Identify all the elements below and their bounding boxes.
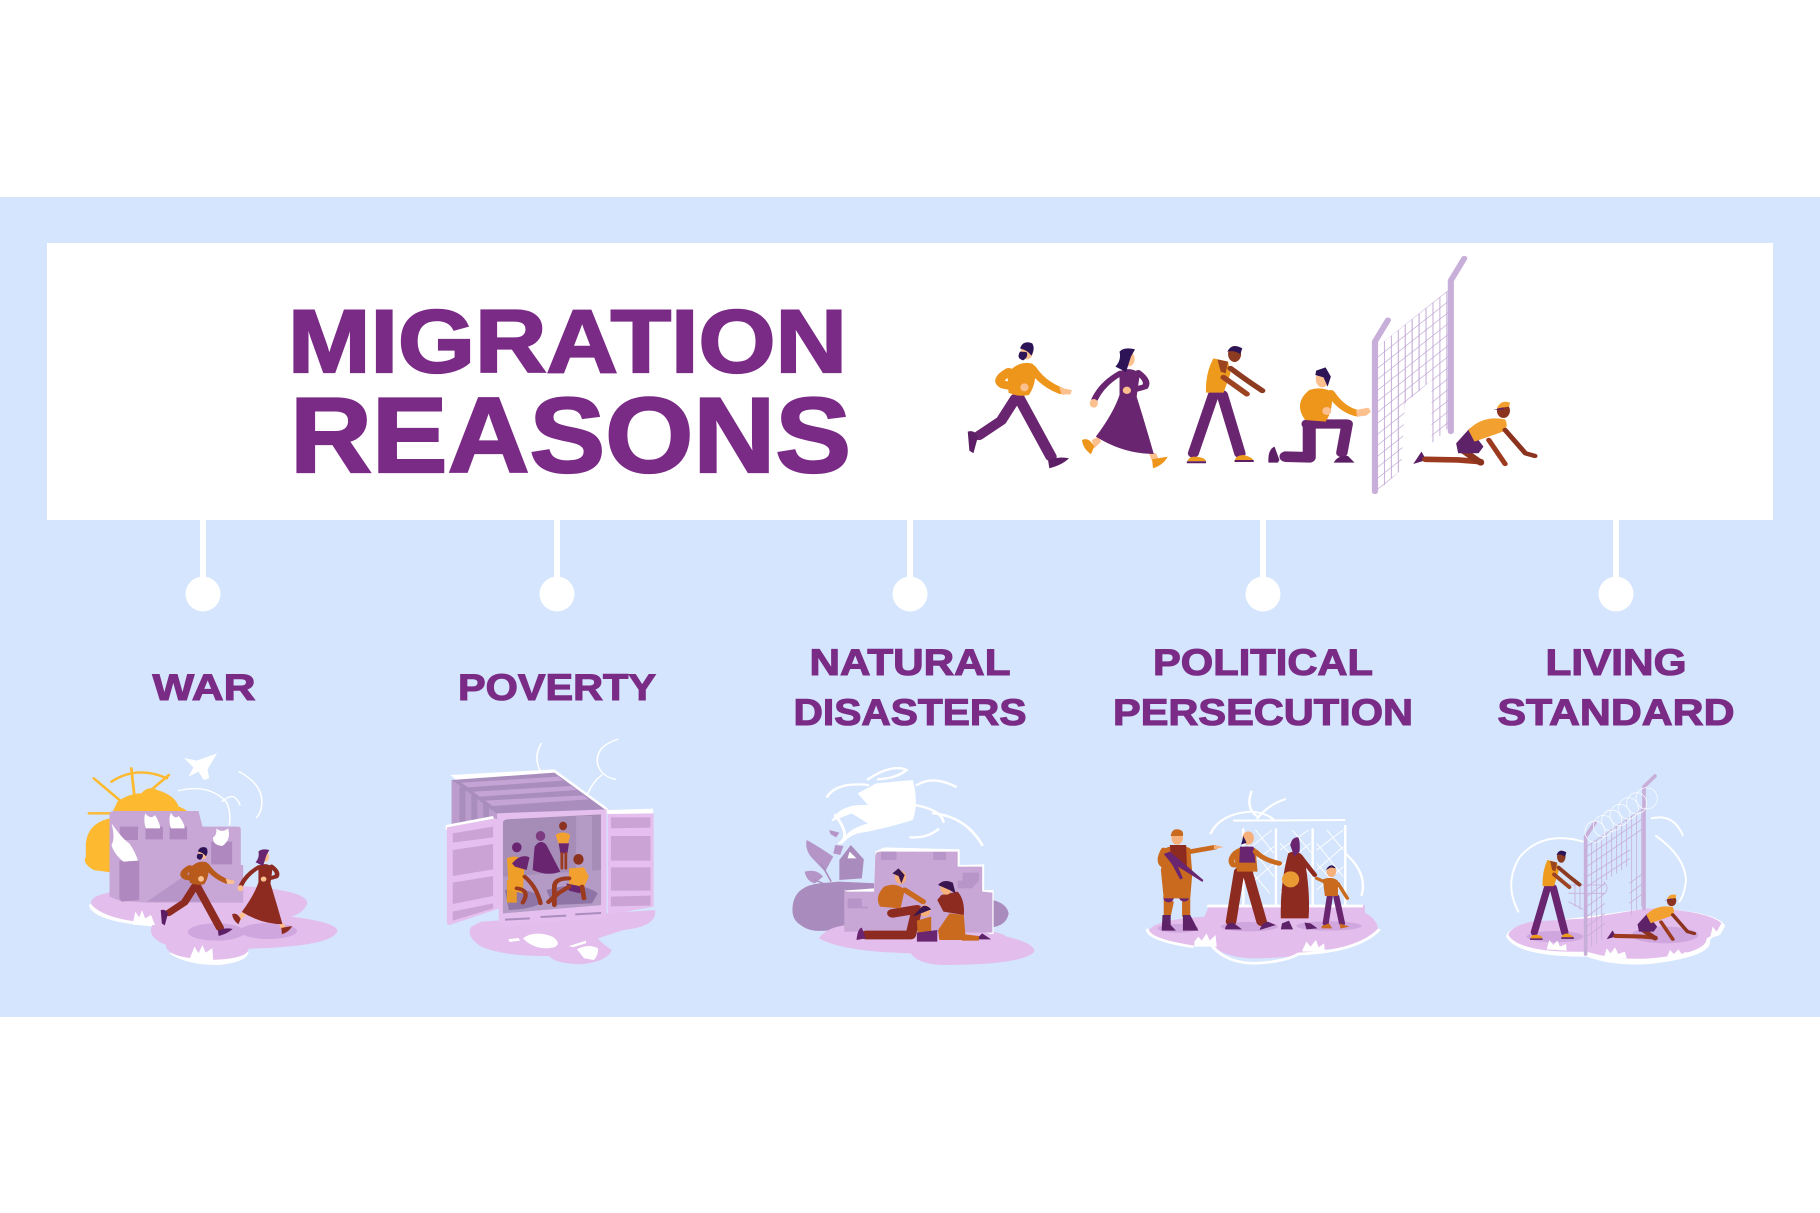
connector: war xyxy=(186,520,220,612)
connector: political persecution xyxy=(1246,520,1280,612)
title: MIGRATION xyxy=(288,291,847,391)
heading: poverty: POVERTY xyxy=(458,667,656,708)
heading: political persecution xyxy=(1113,642,1413,733)
heading: natural disasters xyxy=(794,642,1026,733)
illustration: political persecution xyxy=(1147,792,1379,963)
heading: natural disasters: NATURAL xyxy=(810,642,1010,683)
heading: political persecution: PERSECUTION xyxy=(1113,692,1413,733)
header panel xyxy=(47,243,1773,520)
title xyxy=(288,291,851,495)
illustration: war xyxy=(85,753,337,965)
illustration: living standard xyxy=(1506,776,1725,965)
illustration: natural disasters xyxy=(792,768,1034,965)
heading: living standard: STANDARD xyxy=(1498,692,1734,733)
heading: natural disasters: DISASTERS xyxy=(794,692,1026,733)
title: REASONS xyxy=(290,375,851,495)
illustration: poverty xyxy=(446,739,655,964)
connector: natural disasters xyxy=(892,520,928,612)
connector: living standard xyxy=(1598,520,1634,612)
heading: political persecution: POLITICAL xyxy=(1153,642,1373,683)
connector: poverty xyxy=(540,520,574,612)
heading: living standard xyxy=(1498,642,1734,733)
illustration: migrants crossing fence xyxy=(968,258,1535,492)
heading: war: WAR xyxy=(152,667,256,708)
background band xyxy=(0,197,1820,1017)
heading: living standard: LIVING xyxy=(1546,642,1686,683)
